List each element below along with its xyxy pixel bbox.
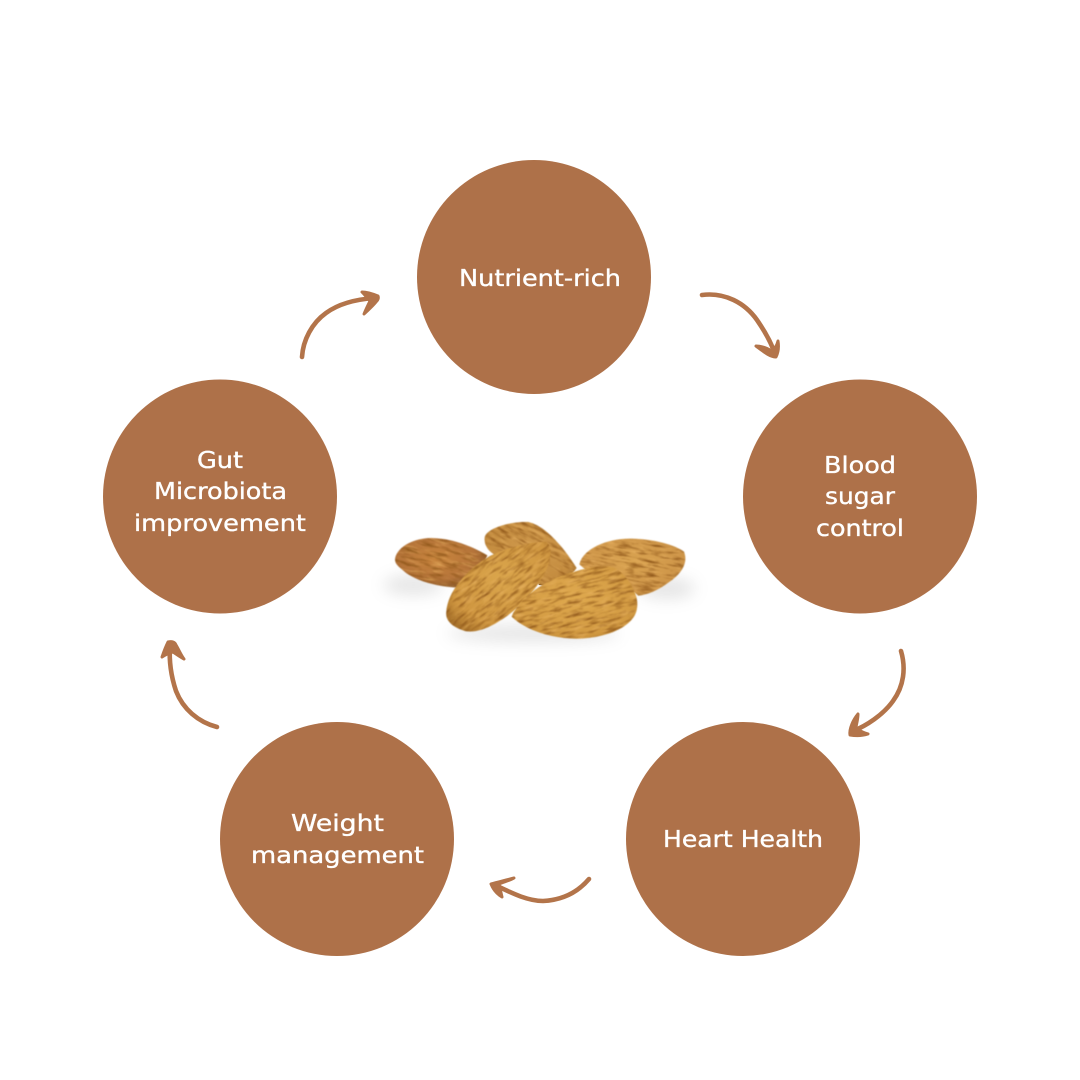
almond: front left [403, 491, 594, 682]
image: almonds [383, 484, 695, 682]
almond: back right [570, 521, 695, 614]
node: Gut Microbiota improvement [103, 380, 337, 614]
almond: back left [383, 516, 499, 610]
node: Gut Microbiota improvement: Gut [197, 448, 243, 474]
node: Gut Microbiota improvement: improvement [134, 511, 306, 537]
arrow: Gut Microbiota improvement to Nutrient-rich [302, 292, 378, 357]
node: Weight management [220, 722, 454, 956]
almond: front right [495, 537, 654, 668]
arrow: Weight management to Gut Microbiota improvement [162, 642, 217, 727]
node: Nutrient-rich: Nutrient-rich [459, 266, 621, 292]
node: Heart Health: Heart Health [663, 827, 823, 853]
node: Blood sugar control: control [816, 516, 904, 542]
node: Weight management: Weight [291, 811, 384, 837]
node: Heart Health [626, 722, 860, 956]
shadow beneath almonds [383, 576, 695, 641]
node: Blood sugar control: Blood [824, 453, 896, 479]
arrow: Nutrient-rich to Blood sugar control [702, 295, 778, 357]
node: Nutrient-rich [417, 160, 651, 394]
node: Weight management: management [251, 843, 424, 869]
dark gap between almonds [538, 572, 560, 587]
almond: back top [456, 484, 605, 628]
node: Blood sugar control [743, 380, 977, 614]
arrow: Heart Health to Weight management [491, 878, 589, 901]
node: Gut Microbiota improvement: Microbiota [154, 479, 287, 505]
arrow: Blood sugar control to Heart Health [850, 651, 904, 736]
node: Blood sugar control: sugar [825, 484, 896, 510]
